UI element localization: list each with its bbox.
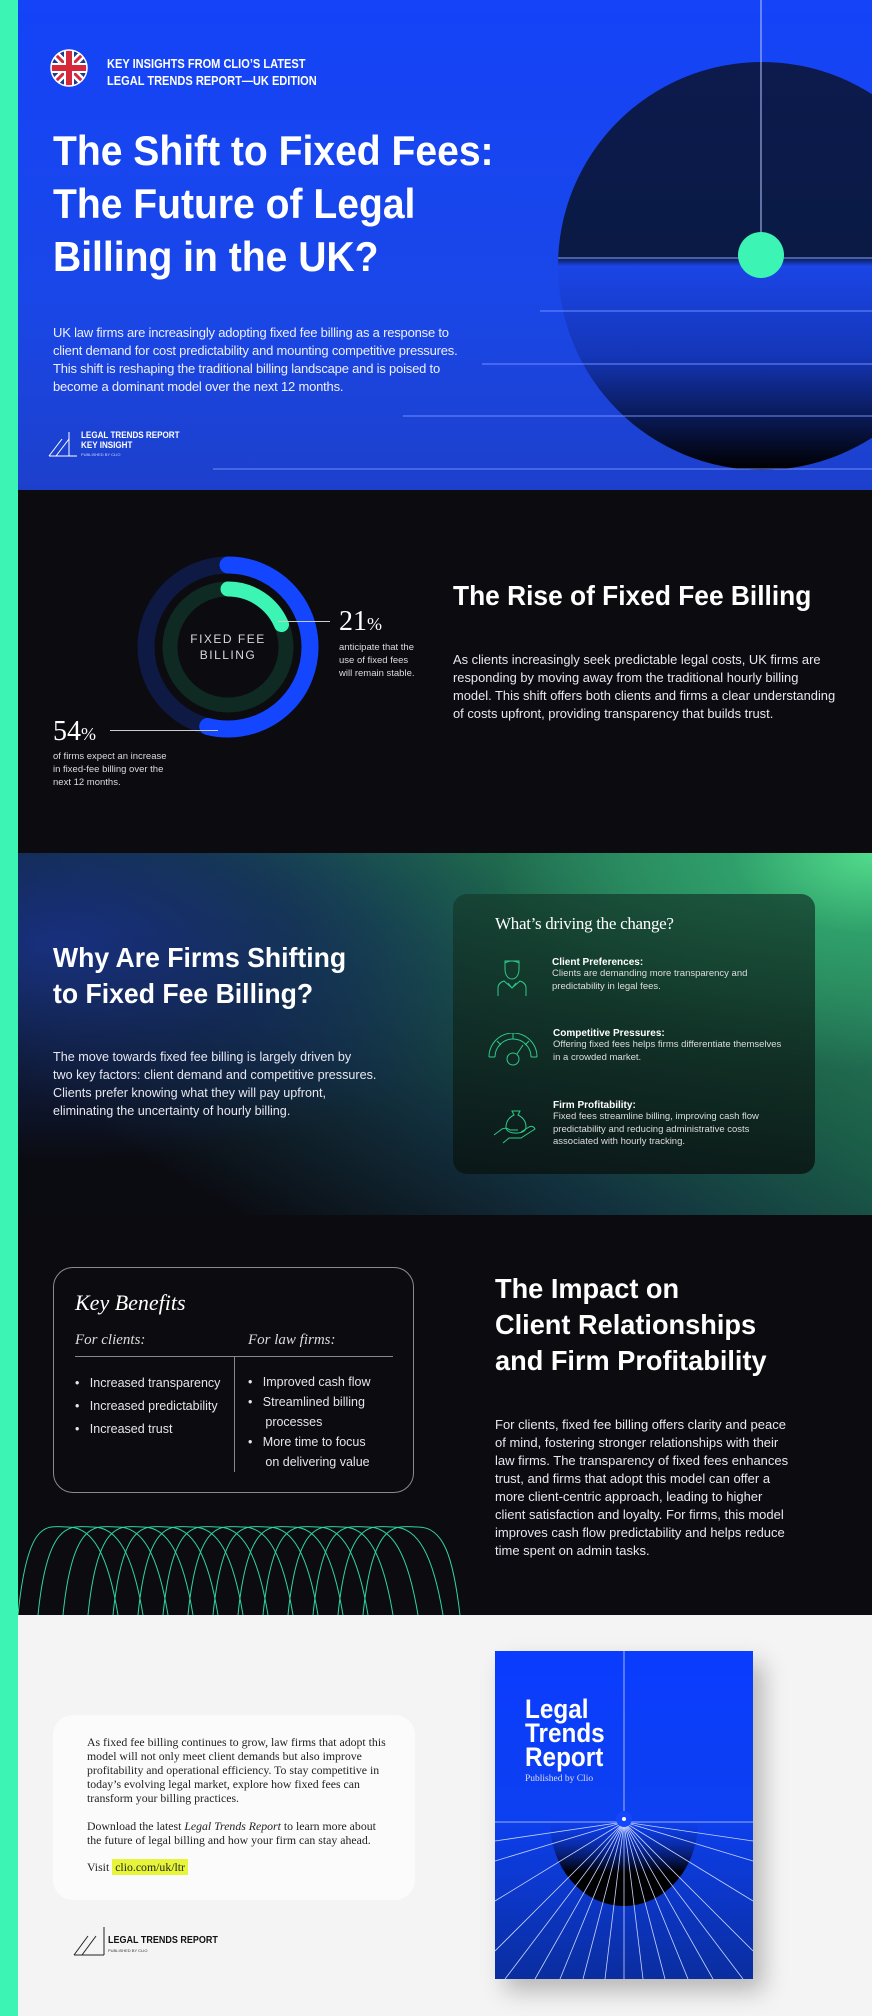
donut chart xyxy=(138,556,318,738)
stat 21%: 21% xyxy=(339,606,382,637)
panel: key benefits: For clients: xyxy=(75,1332,145,1348)
icon: money hand xyxy=(494,1110,536,1144)
client benefits list: • Increased transparency xyxy=(75,1376,220,1390)
kicker: KEY INSIGHTS FROM CLIO’S LATEST xyxy=(107,56,306,71)
title xyxy=(53,127,494,280)
stat 21%: use of fixed fees xyxy=(339,655,408,666)
card heading: What’s driving the change? xyxy=(495,914,674,933)
stat 21%: anticipate that the xyxy=(339,642,414,653)
heading: why are firms shifting xyxy=(53,942,346,1009)
impact paragraph: more client-centric approach, leading to higher xyxy=(495,1489,762,1504)
logo: legal trends report key insight: PUBLISHED BY CLIO xyxy=(81,452,120,457)
donut center label xyxy=(190,632,266,662)
heading: rise of fixed fee billing: The Rise of Fixed Fee Billing xyxy=(453,580,811,611)
key benefits heading: Key Benefits xyxy=(75,1290,186,1315)
item: client preferences: Client Preferences: xyxy=(552,957,643,968)
hero paragraph: This shift is reshaping the traditional billing landscape and is poised to xyxy=(53,361,440,376)
impact paragraph: of mind, fostering stronger relationships with their xyxy=(495,1435,778,1450)
logo: legal trends report footer: LEGAL TRENDS REPORT xyxy=(108,1935,218,1946)
donut center label: BILLING xyxy=(200,648,256,662)
section: why firms shifting xyxy=(18,853,872,1215)
cta card: model will not only meet client demands but also improve xyxy=(87,1749,362,1763)
impact paragraph: client satisfaction and loyalty. For firms, this model xyxy=(495,1507,784,1522)
item: firm profitability: predictability and reducing administrative costs xyxy=(553,1124,749,1134)
impact paragraph: law firms. The transparency of fixed fees enhances xyxy=(495,1453,788,1468)
item: client preferences: predictability in legal fees. xyxy=(552,980,661,992)
impact paragraph: trust, and firms that adopt this model can offer a xyxy=(495,1471,770,1486)
hero paragraph: client demand for cost predictability and mounting competitive pressures. xyxy=(53,343,458,358)
panel: what's driving the change xyxy=(453,894,815,1174)
firm benefits list xyxy=(248,1375,370,1469)
logo: legal trends report key insight: LEGAL TRENDS REPORT xyxy=(81,430,180,441)
rise paragraph: responding by moving away from the traditional hourly billing xyxy=(453,670,798,685)
stat 54% xyxy=(53,716,218,788)
rise paragraph: of costs upfront, providing transparency that builds trust. xyxy=(453,706,773,721)
item: client preferences: Clients are demanding more transparency and xyxy=(552,968,747,979)
section: call to action xyxy=(18,1615,872,2016)
icon: gauge xyxy=(488,1033,538,1066)
impact paragraph xyxy=(495,1417,788,1558)
decorative arches xyxy=(18,1526,460,1615)
firm benefits list: • Improved cash flow xyxy=(248,1375,370,1389)
cta card: today’s evolving legal market, explore how fixed fees can xyxy=(87,1777,360,1791)
title: The Future of Legal xyxy=(53,180,415,227)
report cover: Trends xyxy=(525,1718,605,1748)
hero paragraph xyxy=(53,325,458,394)
logo: legal trends report footer xyxy=(74,1927,218,1956)
why paragraph xyxy=(53,1050,376,1118)
client benefits list xyxy=(75,1376,220,1436)
kicker: LEGAL TRENDS REPORT—UK EDITION xyxy=(107,73,317,88)
item: firm profitability: Fixed fees streamline billing, improving cash flow xyxy=(553,1111,759,1122)
stat 54%: next 12 months. xyxy=(53,777,121,788)
title: Billing in the UK? xyxy=(53,233,378,280)
firm benefits list: • Streamlined billing xyxy=(248,1395,365,1409)
hero graphic: circle with lines xyxy=(213,0,872,470)
item: competitive pressures xyxy=(488,1028,781,1066)
section: rise of fixed fee billing xyxy=(18,490,872,853)
why paragraph: Clients prefer knowing what they will pay upfront, xyxy=(53,1086,326,1100)
stat 54%: of firms expect an increase xyxy=(53,751,167,762)
report cover: Legal xyxy=(525,1694,588,1724)
firm benefits list: on delivering value xyxy=(265,1455,370,1469)
stat 54%: 54% xyxy=(53,716,96,747)
panel: key benefits xyxy=(53,1267,414,1493)
firm benefits list: • More time to focus xyxy=(248,1435,366,1449)
report cover xyxy=(495,1651,753,1979)
section: impact xyxy=(18,1215,872,1615)
icon: UK flag xyxy=(50,49,88,87)
report cover: Published by Clio xyxy=(525,1774,593,1784)
hero paragraph: become a dominant model over the next 12 months. xyxy=(53,379,343,394)
item: competitive pressures: in a crowded market. xyxy=(553,1052,641,1062)
heading: impact: and Firm Profitability xyxy=(495,1345,767,1376)
cta card: As fixed fee billing continues to grow, law firms that adopt this xyxy=(87,1735,386,1749)
why paragraph: The move towards fixed fee billing is largely driven by xyxy=(53,1050,351,1064)
cta card: profitability and operational efficiency. To stay competitive in xyxy=(87,1763,379,1777)
stat 21% xyxy=(278,606,414,679)
cta card xyxy=(53,1715,415,1900)
item: competitive pressures: Offering fixed fees helps firms differentiate themselves xyxy=(553,1039,781,1050)
donut center label: FIXED FEE xyxy=(190,632,266,646)
title: The Shift to Fixed Fees: xyxy=(53,127,494,174)
cta card: transform your billing practices. xyxy=(87,1791,239,1805)
client benefits list: • Increased trust xyxy=(75,1422,172,1436)
hero paragraph: UK law firms are increasingly adopting fixed fee billing as a response to xyxy=(53,325,449,340)
icon: person xyxy=(498,960,526,996)
impact paragraph: improves cash flow predictability and helps reduce xyxy=(495,1525,785,1540)
left accent strip xyxy=(0,0,18,2016)
rise paragraph xyxy=(453,652,835,721)
rise paragraph: As clients increasingly seek predictable legal costs, UK firms are xyxy=(453,652,821,667)
item: client preferences xyxy=(498,957,747,996)
impact paragraph: time spent on admin tasks. xyxy=(495,1543,650,1558)
item: firm profitability: associated with hourly tracking. xyxy=(553,1136,685,1147)
report cover: Report xyxy=(525,1742,603,1772)
panel: key benefits: For law firms: xyxy=(248,1332,336,1348)
why paragraph: two key factors: client demand and competitive pressures. xyxy=(53,1068,376,1082)
why paragraph: eliminating the uncertainty of hourly billing. xyxy=(53,1104,290,1118)
firm benefits list: processes xyxy=(265,1415,322,1429)
impact paragraph: For clients, fixed fee billing offers clarity and peace xyxy=(495,1417,786,1432)
stat 21%: will remain stable. xyxy=(339,668,414,679)
logo: legal trends report key insight: KEY INSIGHT xyxy=(81,440,132,451)
stat 54%: in fixed-fee billing over the xyxy=(53,764,163,775)
cta card: Download the latest Legal Trends Report to learn more about xyxy=(87,1819,376,1833)
link: Visit clio.com/uk/ltr xyxy=(87,1860,185,1874)
heading: impact xyxy=(495,1273,767,1376)
item: competitive pressures: Competitive Pressures: xyxy=(553,1028,665,1039)
heading: why are firms shifting: Why Are Firms Shifting xyxy=(53,942,346,973)
hero section xyxy=(18,0,872,490)
client benefits list: • Increased predictability xyxy=(75,1399,218,1413)
heading: impact: The Impact on xyxy=(495,1273,679,1304)
item: firm profitability xyxy=(494,1100,759,1147)
cta card: the future of legal billing and how your firm can stay ahead. xyxy=(87,1833,371,1847)
kicker xyxy=(107,56,317,88)
rise paragraph: model. This shift offers both clients and firms a clear understanding xyxy=(453,688,835,703)
item: firm profitability: Firm Profitability: xyxy=(553,1100,636,1111)
heading: why are firms shifting: to Fixed Fee Billing? xyxy=(53,978,313,1009)
logo: legal trends report footer: PUBLISHED BY CLIO xyxy=(108,1948,148,1953)
heading: impact: Client Relationships xyxy=(495,1309,756,1340)
logo: legal trends report key insight xyxy=(48,430,180,457)
